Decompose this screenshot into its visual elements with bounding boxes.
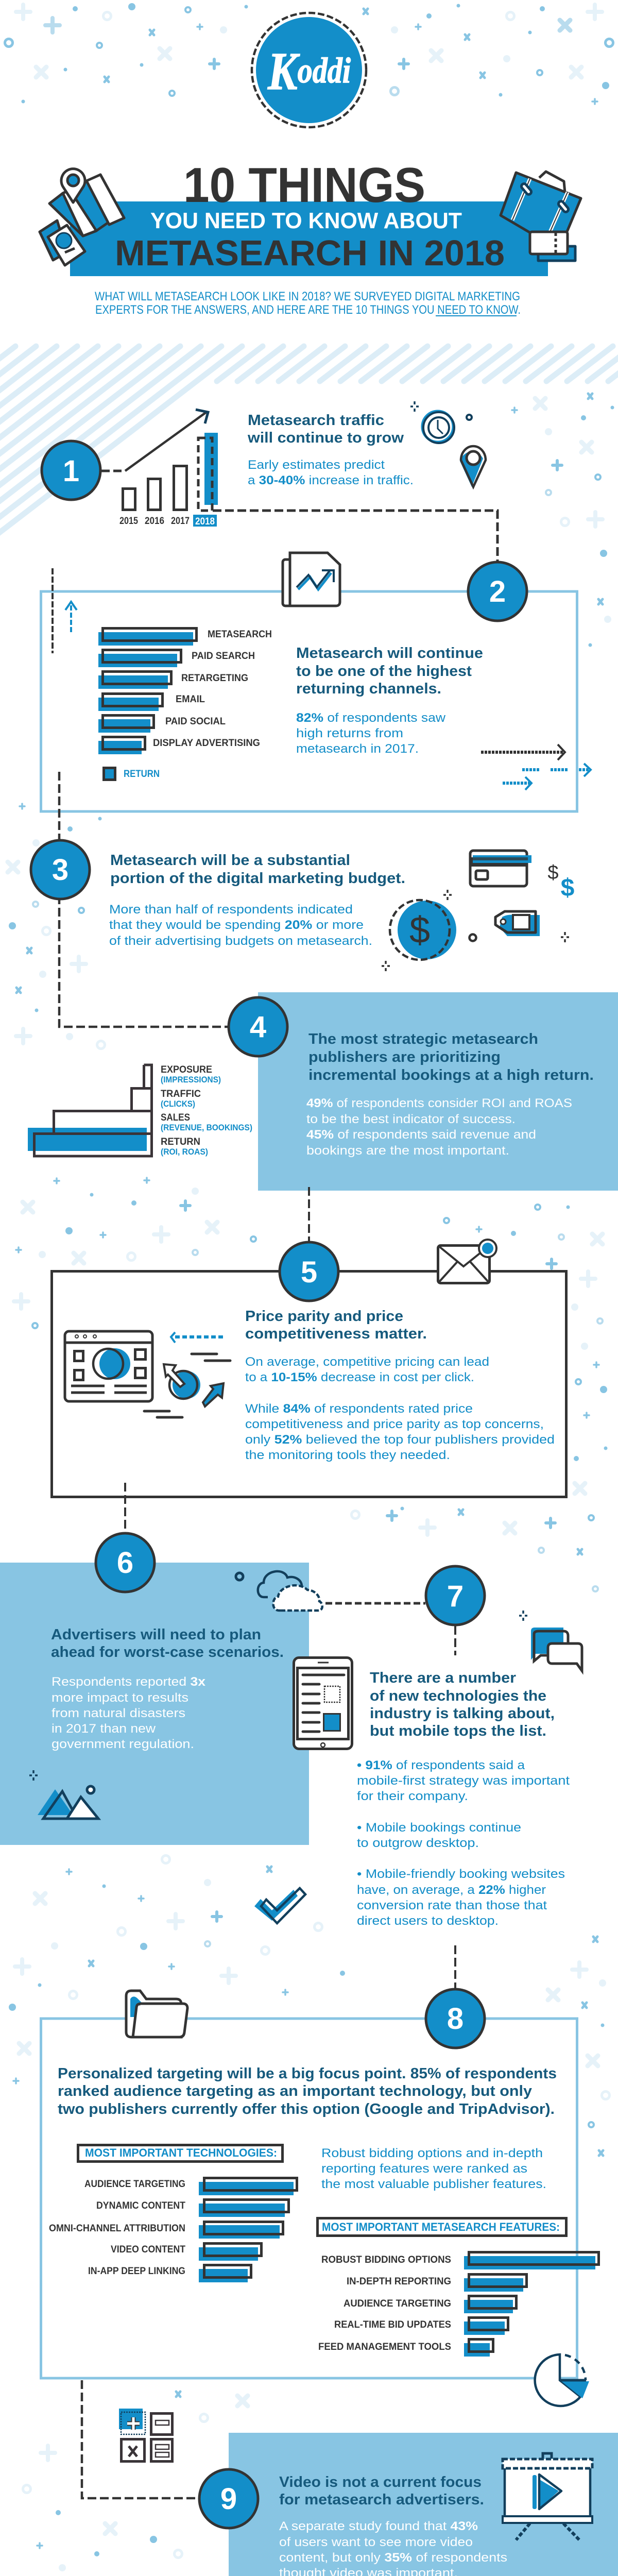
chart: most important technologies: VIDEO CONTENT — [111, 2244, 185, 2255]
number 5 — [280, 1242, 338, 1301]
icon: suitcase and ticket — [501, 172, 581, 261]
bar chart: returns by channel — [98, 629, 272, 754]
number 4: 4 — [250, 1010, 266, 1044]
item 7 text: • Mobile-friendly booking websites — [357, 1867, 565, 1881]
sparkles around budget icons — [382, 890, 569, 971]
number 1 — [42, 441, 100, 500]
item 5 text: On average, competitive pricing can lead — [245, 1355, 489, 1369]
item 9 text: content, but only 35% of respondents — [279, 2551, 507, 2565]
item 4 text: 49% of respondents consider ROI and ROAS — [306, 1096, 572, 1110]
item 7 text: conversion rate than those that — [357, 1899, 547, 1912]
item 3 text: of their advertising budgets on metasearch. — [109, 934, 372, 948]
number 4 — [229, 997, 287, 1056]
bar chart: returns by channel: METASEARCH — [208, 629, 272, 640]
item 5 text: While 84% of respondents rated price — [245, 1402, 473, 1416]
item 1: bar chart with growth arrow: 2016 — [145, 516, 164, 527]
title line: metasearch in 2018: METASEARCH IN 2018 — [115, 233, 505, 273]
item 1: bar chart with growth arrow — [101, 410, 218, 527]
icon: dollar coin — [390, 900, 456, 960]
funnel chart: SALES — [161, 1112, 190, 1123]
intro text — [95, 290, 521, 317]
chart: most important technologies: MOST IMPORTANT TECHNOLOGIES: — [85, 2146, 277, 2159]
icon: location pin — [410, 401, 486, 487]
item 7 text: industry is talking about, — [370, 1705, 555, 1722]
panel 9: video — [229, 2433, 618, 2576]
number 6: 6 — [117, 1546, 133, 1580]
logo badge: K — [267, 42, 300, 101]
funnel chart: (IMPRESSIONS) — [161, 1075, 221, 1084]
number 8: 8 — [447, 2002, 464, 2036]
icon: clouds — [236, 1571, 322, 1611]
icon: dollar signs: $ — [561, 874, 575, 902]
item 7 text: have, on average, a 22% higher — [357, 1883, 546, 1897]
item 7 text: but mobile tops the list. — [370, 1723, 546, 1739]
chart: most important metasearch features: REAL-TIME BID UPDATES — [334, 2319, 451, 2330]
arrow: dark dotted arrow — [481, 744, 565, 760]
connector: 1 to 2 — [213, 511, 497, 562]
icon: map, pin and passport — [40, 169, 124, 265]
item 6 text: more impact to results — [52, 1691, 188, 1705]
panel 4: strategic publishers — [258, 992, 618, 1191]
panel 6: worst-case planning — [0, 1563, 309, 1845]
item 5 text — [245, 1308, 555, 1462]
item 5 text: competitiveness and price parity as top concerns, — [245, 1417, 544, 1431]
item 8 heading: Personalized targeting will be a big focus point. 85% of respondents — [58, 2065, 557, 2082]
item 1: bar chart with growth arrow: 2018 — [195, 516, 215, 527]
number 3 — [31, 840, 90, 899]
chart: most important technologies: DYNAMIC CONTENT — [96, 2200, 185, 2211]
item 6 text: Respondents reported 3x — [52, 1675, 206, 1689]
item 7 text: • 91% of respondents said a — [357, 1758, 525, 1772]
number 1: 1 — [63, 454, 79, 488]
icon: smartphone — [294, 1658, 352, 1749]
number 7: 7 — [447, 1580, 464, 1613]
item 4 text: The most strategic metasearch — [308, 1031, 538, 1047]
number 9 — [199, 2469, 258, 2528]
connector: 4 to 5 — [308, 1187, 310, 1243]
chart: most important metasearch features: MOST IMPORTANT METASEARCH FEATURES: — [322, 2221, 560, 2233]
item 5 text: competitiveness matter. — [245, 1326, 427, 1342]
funnel chart: RETURN — [161, 1137, 200, 1147]
chart: most important metasearch features: IN-DEPTH REPORTING — [347, 2276, 451, 2287]
chart: most important technologies — [49, 2145, 297, 2282]
icon: pie chart — [535, 2354, 589, 2406]
chart: most important metasearch features: AUDIENCE TARGETING — [344, 2298, 451, 2309]
chart: most important metasearch features: FEED MANAGEMENT TOOLS — [318, 2342, 451, 2352]
item 3 text: Metasearch will be a substantial — [110, 852, 350, 869]
item 7 text: for their company. — [357, 1789, 468, 1803]
item 7 text — [357, 1670, 570, 1928]
item 4 text: 45% of respondents said revenue and — [306, 1128, 536, 1142]
connector: check to 8 — [454, 1945, 456, 1990]
body: robust bidding options: the most valuable publisher features. — [321, 2177, 546, 2191]
icon: mountains — [29, 1770, 98, 1819]
arrow: blue dotted left arrow — [171, 1332, 225, 1343]
item 1: bar chart with growth arrow: 2015 — [119, 516, 138, 527]
number 8 — [426, 1989, 485, 2048]
item 3 text: that they would be spending 20% or more — [109, 918, 364, 932]
icon: dollar coin: $ — [409, 910, 430, 951]
title banner — [70, 158, 548, 276]
icon: document with trend line — [283, 553, 340, 606]
item 1 text: Early estimates predict — [248, 458, 385, 472]
item 4 text: bookings are the most important. — [306, 1144, 509, 1158]
title line: you need to know about: YOU NEED TO KNOW ABOUT — [150, 208, 462, 233]
item 4 text: publishers are prioritizing — [308, 1049, 501, 1065]
item 9 text: of users want to see more video — [279, 2535, 473, 2549]
item 2 text: returning channels. — [296, 681, 441, 697]
funnel chart: (REVENUE, BOOKINGS) — [161, 1123, 252, 1132]
funnel chart: (CLICKS) — [161, 1099, 195, 1109]
icon: check mark — [254, 1888, 305, 1923]
item 5 text: Price parity and price — [245, 1308, 403, 1325]
panel 5: price parity — [52, 1272, 566, 1497]
intro text: EXPERTS FOR THE ANSWERS, AND HERE ARE THE 10 THINGS YOU NEED TO KNOW. — [95, 303, 521, 317]
item 1 text: will continue to grow — [247, 430, 404, 446]
icon: clock — [422, 411, 454, 443]
item 4 text: incremental bookings at a high return. — [308, 1067, 594, 1083]
item 6 text: Advertisers will need to plan — [51, 1626, 261, 1643]
item 8 heading: two publishers currently offer this option (Google and TripAdvisor). — [58, 2101, 555, 2117]
title line: 10 things: 10 THINGS — [183, 158, 425, 213]
chart: most important metasearch features — [317, 2218, 598, 2357]
funnel chart — [28, 1064, 252, 1157]
icon: browser window — [65, 1331, 152, 1401]
item 5 text: the monitoring tools they needed. — [245, 1448, 450, 1462]
icon: cursor and arrows — [164, 1364, 224, 1406]
item 4 text — [306, 1031, 594, 1158]
panel 2: highest returning channels — [41, 591, 577, 811]
item 5 text: only 52% believed the top four publishers provided — [245, 1433, 555, 1447]
item 3 text: portion of the digital marketing budget. — [110, 870, 405, 887]
legend: return: RETURN — [124, 769, 160, 779]
icon: dollar signs: $ — [547, 862, 559, 884]
number 5: 5 — [301, 1256, 317, 1289]
number 6 — [96, 1533, 154, 1592]
connector: 5 to 6 — [124, 1483, 126, 1530]
number 2 — [468, 562, 527, 621]
item 2 text: metasearch in 2017. — [296, 742, 419, 756]
number 7 — [426, 1566, 485, 1625]
bar chart: returns by channel: RETARGETING — [181, 673, 248, 684]
item 3 text: More than half of respondents indicated — [109, 903, 353, 917]
connector: 8 to 9 — [82, 2380, 199, 2498]
body: robust bidding options — [321, 2146, 546, 2191]
item 2 text — [296, 645, 483, 756]
item 9 text — [279, 2474, 507, 2576]
funnel chart: TRAFFIC — [161, 1089, 201, 1099]
panel 8: personalized targeting — [41, 2019, 577, 2378]
bar chart: returns by channel: EMAIL — [176, 694, 205, 705]
item 4 text: to be the best indicator of success. — [306, 1112, 516, 1126]
item 1: bar chart with growth arrow: 2017 — [171, 516, 190, 527]
item 3 text — [109, 852, 405, 948]
number 2: 2 — [489, 575, 506, 608]
legend: return — [104, 768, 160, 780]
item 6 text: from natural disasters — [52, 1706, 185, 1720]
bar chart: returns by channel: PAID SOCIAL — [165, 716, 226, 727]
chart: most important technologies: AUDIENCE TARGETING — [84, 2179, 185, 2190]
item 5 text: to a 10-15% decrease in cost per click. — [245, 1370, 474, 1384]
bar chart: returns by channel: PAID SEARCH — [192, 651, 255, 662]
number 9: 9 — [220, 2482, 237, 2516]
item 2 text: 82% of respondents saw — [296, 711, 446, 725]
icon: dollar signs — [547, 862, 575, 902]
icon: app grid — [119, 2409, 172, 2462]
item 1 text: a 30-40% increase in traffic. — [248, 473, 414, 487]
body: robust bidding options: Robust bidding options and in-depth — [321, 2146, 543, 2160]
arrows: blue dotted arrows — [503, 764, 591, 790]
item 1 text — [247, 412, 414, 487]
item 1 text: Metasearch traffic — [248, 412, 384, 429]
item 8 heading — [58, 2065, 557, 2117]
item 9 text: A separate study found that 43% — [279, 2519, 478, 2533]
item 6 text: government regulation. — [52, 1737, 194, 1751]
item 7 text: of new technologies the — [370, 1688, 546, 1704]
funnel chart: EXPOSURE — [161, 1064, 212, 1075]
item 6 text — [51, 1626, 284, 1751]
logo badge — [252, 13, 366, 127]
chart: most important technologies: IN-APP DEEP LINKING — [88, 2266, 185, 2277]
icon: chat bubbles — [519, 1611, 582, 1671]
arrow: blue up arrow — [65, 602, 77, 632]
item 7 text: • Mobile bookings continue — [357, 1821, 521, 1835]
chart: most important metasearch features: ROBUST BIDDING OPTIONS — [321, 2255, 451, 2265]
item 7 text: mobile-first strategy was important — [357, 1774, 570, 1788]
icon: envelope — [438, 1240, 496, 1283]
connector: 2 to 3 to 4 — [59, 772, 229, 1027]
item 2 text: high returns from — [296, 726, 403, 740]
icon: price tag — [495, 911, 540, 936]
icon: folder — [126, 1991, 187, 2037]
item 8 heading: ranked audience targeting as an important technology, but only — [58, 2083, 532, 2099]
item 6 text: ahead for worst-case scenarios. — [51, 1644, 284, 1660]
body: robust bidding options: reporting features were ranked as — [321, 2162, 527, 2176]
item 7 text: to outgrow desktop. — [357, 1836, 479, 1850]
chart: most important technologies: OMNI-CHANNEL ATTRIBUTION — [49, 2223, 185, 2234]
connector: 7 to phone — [454, 1626, 456, 1655]
number 3: 3 — [52, 853, 68, 887]
item 9 text: for metasearch advertisers. — [279, 2492, 484, 2508]
logo badge: oddi — [298, 51, 351, 91]
item 9 text: Video is not a current focus — [279, 2474, 482, 2490]
item 2 text: to be one of the highest — [296, 663, 472, 680]
icon: projector screen with play button — [503, 2453, 592, 2540]
item 6 text: in 2017 than new — [52, 1722, 156, 1736]
funnel chart: (ROI, ROAS) — [161, 1147, 208, 1157]
item 2 text: Metasearch will continue — [296, 645, 483, 662]
item 7 text: There are a number — [370, 1670, 516, 1686]
connector: cloud to 7 — [325, 1602, 425, 1604]
bar chart: returns by channel: DISPLAY ADVERTISING — [153, 738, 260, 749]
icon: credit card — [469, 851, 531, 886]
item 7 text: direct users to desktop. — [357, 1914, 499, 1928]
decorative dashed line left of panel 2 — [52, 568, 54, 653]
intro text: WHAT WILL METASEARCH LOOK LIKE IN 2018? WE SURVEYED DIGITAL MARKETING — [95, 290, 520, 303]
